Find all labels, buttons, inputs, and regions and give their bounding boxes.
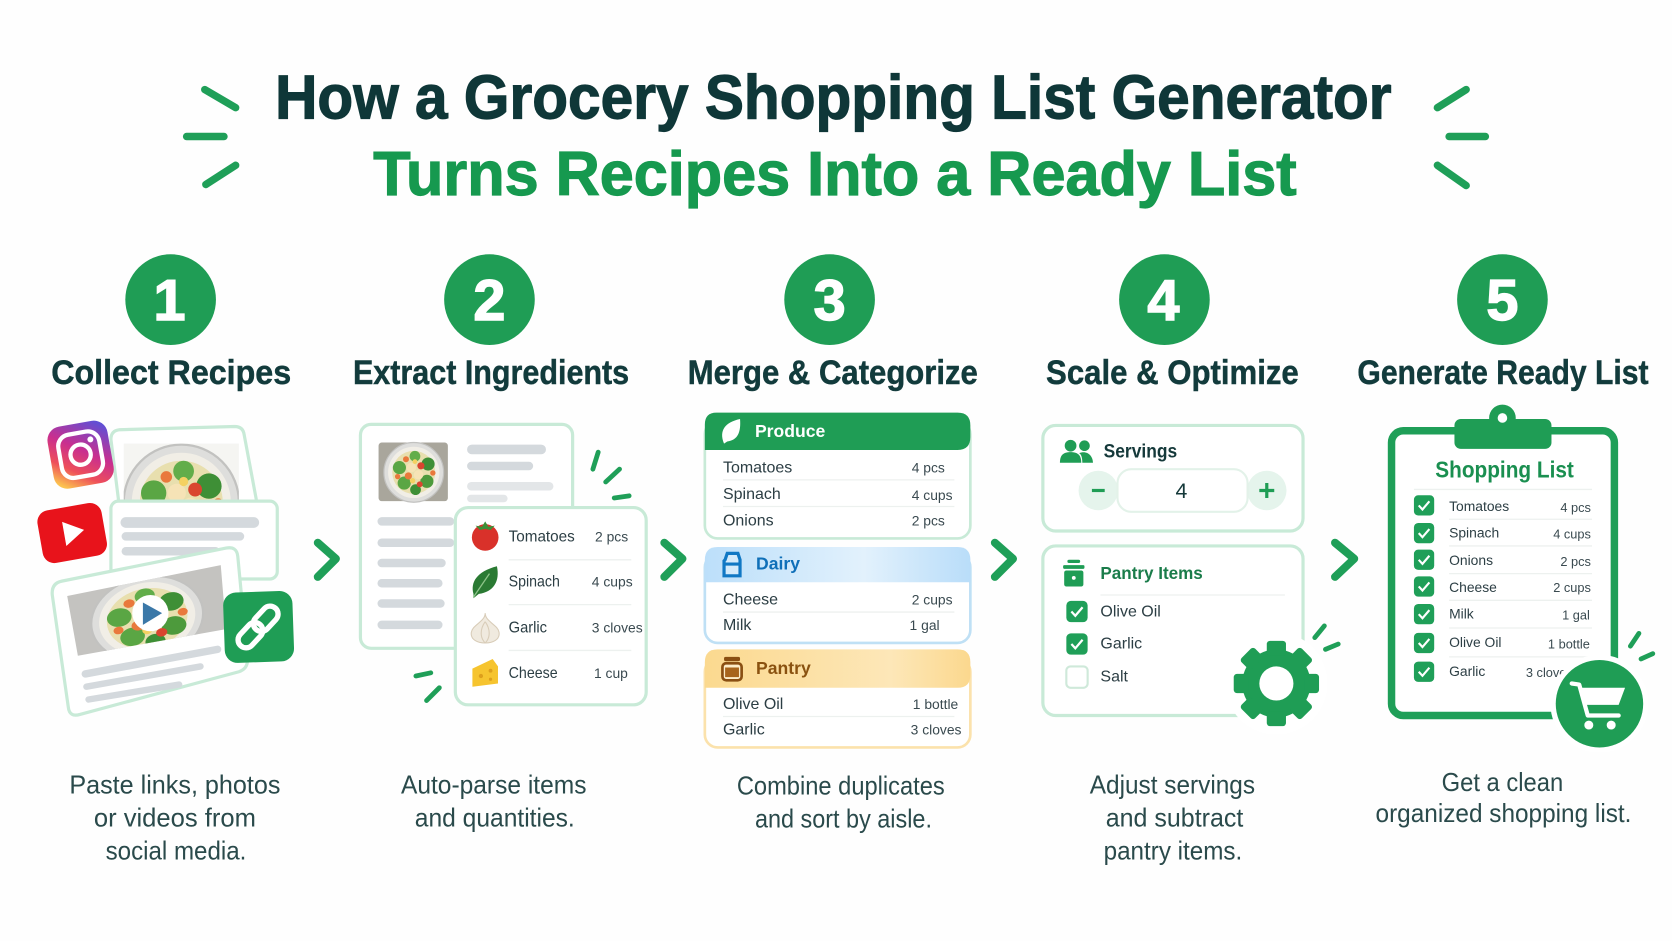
- step 4 header: 4: [1147, 269, 1179, 333]
- pantry group: [705, 649, 970, 747]
- icon: youtube: [36, 501, 109, 565]
- recipe text card: [111, 501, 277, 579]
- description step 5: organized shopping list.: [1376, 798, 1631, 828]
- icon: spinach: [473, 566, 498, 598]
- step 5 header: [1357, 254, 1649, 392]
- step 2 header: 2: [473, 269, 505, 333]
- step 1 header: Collect Recipes: [51, 354, 291, 392]
- list rows: [1414, 489, 1592, 682]
- pantry items card: Garlic: [1100, 635, 1142, 652]
- dairy group: 1 gal: [910, 617, 940, 633]
- icon: milk carton: [724, 553, 740, 576]
- ingredient card: 4 cups: [592, 573, 633, 589]
- description step 5: Get a clean: [1442, 767, 1563, 797]
- dairy group: [705, 547, 970, 643]
- step 2 header: Extract Ingredients: [353, 354, 629, 392]
- description step 1: [69, 769, 280, 865]
- pantry group: Garlic: [723, 722, 765, 739]
- list rows: Garlic: [1449, 663, 1485, 679]
- list rows: Cheese: [1449, 579, 1497, 595]
- icon: link: [223, 591, 294, 663]
- produce group: Spinach: [723, 486, 781, 503]
- icon: leaf: [722, 419, 740, 444]
- pantry items card: Salt: [1100, 668, 1129, 685]
- sparkle marks: [416, 452, 629, 701]
- icon: pantry canister: [1063, 560, 1084, 586]
- step 3 header: [688, 254, 978, 392]
- list rows: 4 cups: [1553, 526, 1591, 541]
- sparkle marks: [1630, 633, 1653, 659]
- list rows: Spinach: [1449, 524, 1499, 540]
- ingredient card: 2 pcs: [595, 529, 628, 545]
- icon: jar: [722, 657, 742, 680]
- produce group: 4 cups: [912, 487, 953, 503]
- step 1 header: [51, 254, 291, 392]
- ingredient card: [455, 508, 646, 705]
- list rows: 3 cloves: [1526, 665, 1573, 680]
- title: Turns Recipes Into a Ready List: [373, 140, 1297, 209]
- arrow 2 to 3: [664, 543, 682, 577]
- description step 3: and sort by aisle.: [755, 803, 932, 833]
- description step 4: Adjust servings: [1090, 769, 1255, 799]
- ingredient card: Garlic: [509, 619, 547, 636]
- icon: shopping cart: [1550, 655, 1649, 753]
- description step 4: pantry items.: [1104, 835, 1242, 865]
- pantry items card: Olive Oil: [1100, 603, 1161, 620]
- description step 5: [1376, 767, 1631, 828]
- pantry items card: Pantry Items: [1100, 563, 1203, 583]
- step 1 header: 1: [154, 269, 186, 333]
- icon: cheese: [472, 659, 498, 687]
- video card: [52, 548, 248, 715]
- step 5 header: 5: [1486, 269, 1518, 333]
- description step 2: and quantities.: [415, 802, 575, 832]
- description step 1: social media.: [106, 835, 246, 865]
- icon: tomato: [472, 521, 499, 551]
- step 2 header: [353, 254, 629, 392]
- ingredient card: 1 cup: [594, 665, 628, 681]
- description step 1: or videos from: [94, 802, 256, 832]
- dairy group: Milk: [723, 617, 752, 634]
- icon: gear: [1225, 632, 1328, 735]
- list rows: 4 pcs: [1560, 500, 1591, 515]
- clipboard: [1392, 405, 1614, 715]
- list rows: 1 gal: [1562, 608, 1590, 623]
- list rows: 2 pcs: [1560, 554, 1591, 569]
- description step 3: Combine duplicates: [737, 770, 945, 800]
- panel: merge and categorize illustration: [705, 413, 970, 747]
- pantry group: Olive Oil: [723, 696, 783, 713]
- title: How a Grocery Shopping List Generator: [275, 63, 1392, 132]
- list rows: 2 cups: [1553, 580, 1591, 595]
- produce group: [705, 413, 970, 538]
- arrow 4 to 5: [1335, 543, 1354, 577]
- panel: extract ingredients illustration: [360, 424, 646, 705]
- panel: scale and optimize illustration: [1043, 425, 1338, 735]
- arrow 1 to 2: [318, 543, 336, 577]
- pantry group: Pantry: [756, 658, 811, 678]
- produce group: Produce: [755, 421, 826, 441]
- step 3 header: 3: [814, 269, 846, 333]
- sparkle marks: [1315, 626, 1338, 649]
- pantry group: 3 cloves: [911, 722, 962, 738]
- list rows: 1 bottle: [1548, 636, 1590, 651]
- arrow 3 to 4: [995, 543, 1013, 577]
- recipe document: [360, 424, 573, 648]
- ingredient card: 3 cloves: [592, 619, 643, 635]
- list rows: Onions: [1449, 552, 1493, 568]
- dairy group: Dairy: [756, 553, 800, 573]
- dairy group: 2 cups: [912, 592, 953, 608]
- produce group: 2 pcs: [912, 513, 945, 529]
- produce group: Onions: [723, 513, 774, 530]
- step 4 header: Scale & Optimize: [1046, 354, 1299, 392]
- ingredient card: Spinach: [509, 573, 560, 590]
- produce group: Tomatoes: [723, 459, 792, 476]
- list heading: Shopping List: [1435, 457, 1574, 483]
- title: [275, 63, 1392, 209]
- right title burst: [1437, 90, 1485, 186]
- left title burst: [187, 90, 236, 184]
- list rows: Olive Oil: [1449, 634, 1501, 650]
- step 3 header: Merge & Categorize: [688, 354, 978, 392]
- dairy group: Cheese: [723, 592, 778, 609]
- recipe card with photo: [109, 424, 258, 500]
- icon: garlic: [471, 613, 499, 643]
- ingredient card: Tomatoes: [509, 529, 575, 546]
- servings card: 4: [1176, 479, 1188, 503]
- icon: people: [1060, 440, 1093, 463]
- pantry group: 1 bottle: [913, 696, 959, 712]
- pantry items card: [1043, 546, 1303, 715]
- description step 2: [401, 769, 586, 832]
- panel: generate ready list illustration: [1392, 405, 1653, 753]
- servings card: [1043, 425, 1303, 531]
- produce group: 4 pcs: [912, 459, 945, 475]
- panel: collect recipes illustration: [36, 418, 294, 715]
- description step 4: [1090, 769, 1255, 865]
- description step 3: [737, 770, 945, 833]
- description step 1: Paste links, photos: [69, 769, 280, 799]
- description step 4: and subtract: [1106, 802, 1244, 832]
- step 4 header: [1046, 254, 1299, 392]
- icon: instagram: [45, 418, 116, 491]
- ingredient card: Cheese: [509, 665, 558, 682]
- description step 2: Auto-parse items: [401, 769, 586, 799]
- list rows: Tomatoes: [1449, 498, 1509, 514]
- list rows: Milk: [1449, 605, 1474, 621]
- servings card: Servings: [1104, 441, 1177, 462]
